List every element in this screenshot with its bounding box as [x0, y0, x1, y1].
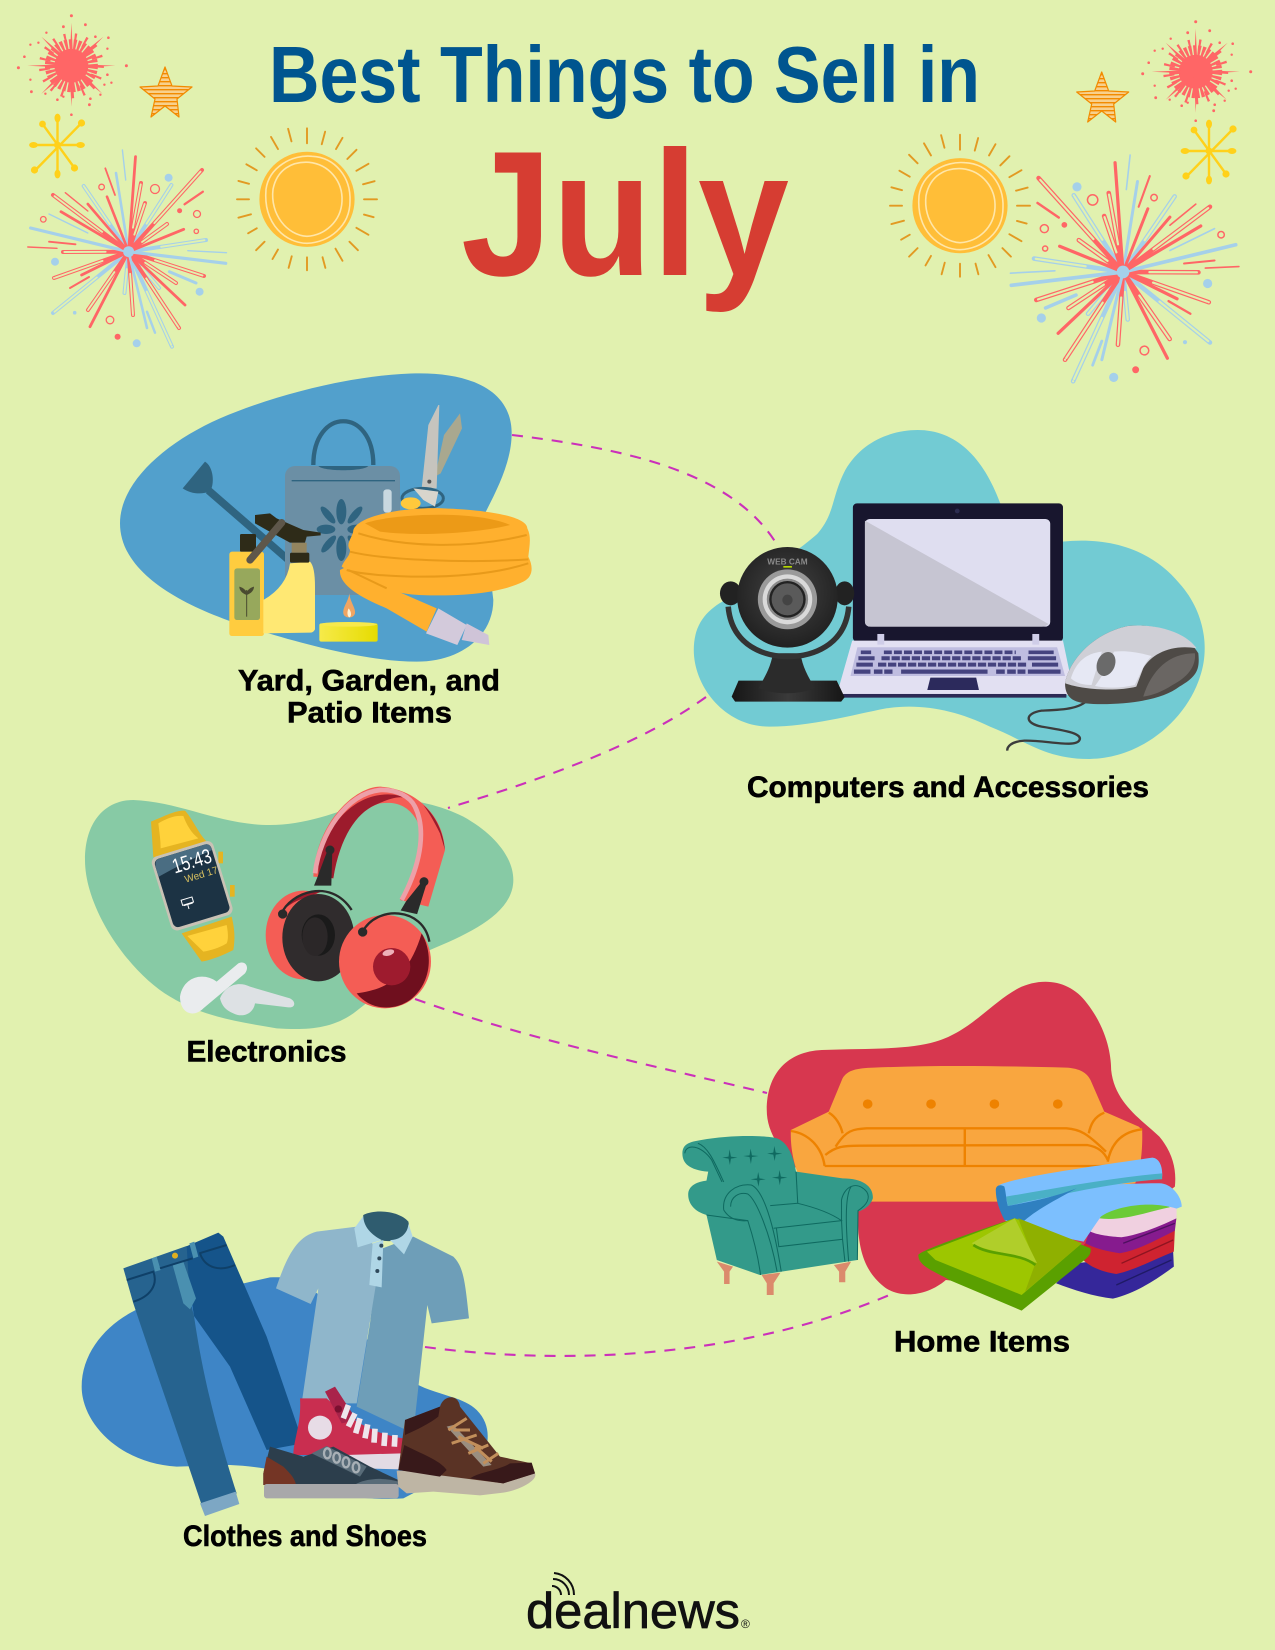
icon: right sun — [890, 135, 1030, 277]
panel: clothes and shoes — [82, 1212, 535, 1516]
icon: armchair — [682, 1136, 873, 1295]
label: yard — [238, 664, 500, 730]
icon: stacked blankets — [996, 1158, 1182, 1299]
label: yard: Patio Items — [287, 696, 452, 730]
icon: laptop — [837, 503, 1074, 698]
icon: right star — [1077, 72, 1129, 122]
icon: red sneaker — [293, 1387, 403, 1469]
label: computers: Computers and Accessories — [747, 771, 1149, 804]
blob: red — [767, 982, 1175, 1294]
blob: blue — [120, 373, 512, 662]
firework: right burst — [1141, 20, 1252, 122]
icon: hiking boot — [397, 1397, 535, 1495]
icon: left star — [140, 67, 192, 117]
icon: garden hose — [340, 508, 532, 645]
icon: earbuds — [180, 962, 294, 1015]
label: clothes: Clothes and Shoes — [183, 1520, 427, 1553]
icon: mouse — [1007, 626, 1199, 751]
dashed connector: computers to electronics — [448, 697, 706, 808]
firework: left large — [28, 150, 226, 347]
icon: left sun — [237, 128, 377, 270]
blob: teal — [694, 430, 1205, 759]
icon: scissors — [401, 405, 462, 509]
icon: spray bottle — [229, 513, 321, 636]
icon: sofa — [791, 1066, 1142, 1202]
icon: polo shirt — [276, 1212, 469, 1433]
panel: computers and accessories — [694, 430, 1205, 759]
icon: folded green towel — [918, 1218, 1091, 1311]
logo: dealnews: dealnews — [526, 1583, 740, 1639]
icon: smart watch: Wed 17 — [183, 865, 220, 886]
icon: webcam — [720, 547, 854, 702]
dashed connector: electronics to home — [415, 999, 767, 1093]
icon: smart watch — [150, 811, 235, 962]
dashed connector: clothes to home — [425, 1293, 894, 1356]
icon: smart watch: 15:43 — [169, 845, 214, 878]
firework: left burst — [17, 14, 128, 116]
firework: right large — [1010, 155, 1239, 382]
panel: electronics — [85, 787, 513, 1029]
icon: headphones — [266, 787, 445, 1008]
label: home items: Home Items — [894, 1326, 1070, 1358]
firework: right asterisk — [1181, 120, 1237, 184]
label: electronics: Electronics — [186, 1036, 346, 1068]
icon: watering can — [183, 421, 400, 595]
blob: green — [85, 799, 513, 1029]
panel: home items — [682, 982, 1182, 1311]
dashed connector: yard to computers — [512, 435, 776, 543]
title line: Best Things to Sell in — [269, 30, 980, 119]
label: yard: Yard, Garden, and — [238, 664, 500, 698]
icon: webcam: WEB CAM — [767, 558, 808, 567]
logo: dealnews: ® — [741, 1617, 750, 1631]
firework: left asterisk — [29, 114, 85, 178]
title: July: July — [461, 114, 789, 313]
blob: blue — [82, 1277, 488, 1499]
panel: yard, garden and patio — [120, 373, 532, 662]
icon: candle — [319, 593, 378, 642]
icon: jeans — [123, 1233, 303, 1516]
icon: dark shoe — [263, 1446, 399, 1498]
